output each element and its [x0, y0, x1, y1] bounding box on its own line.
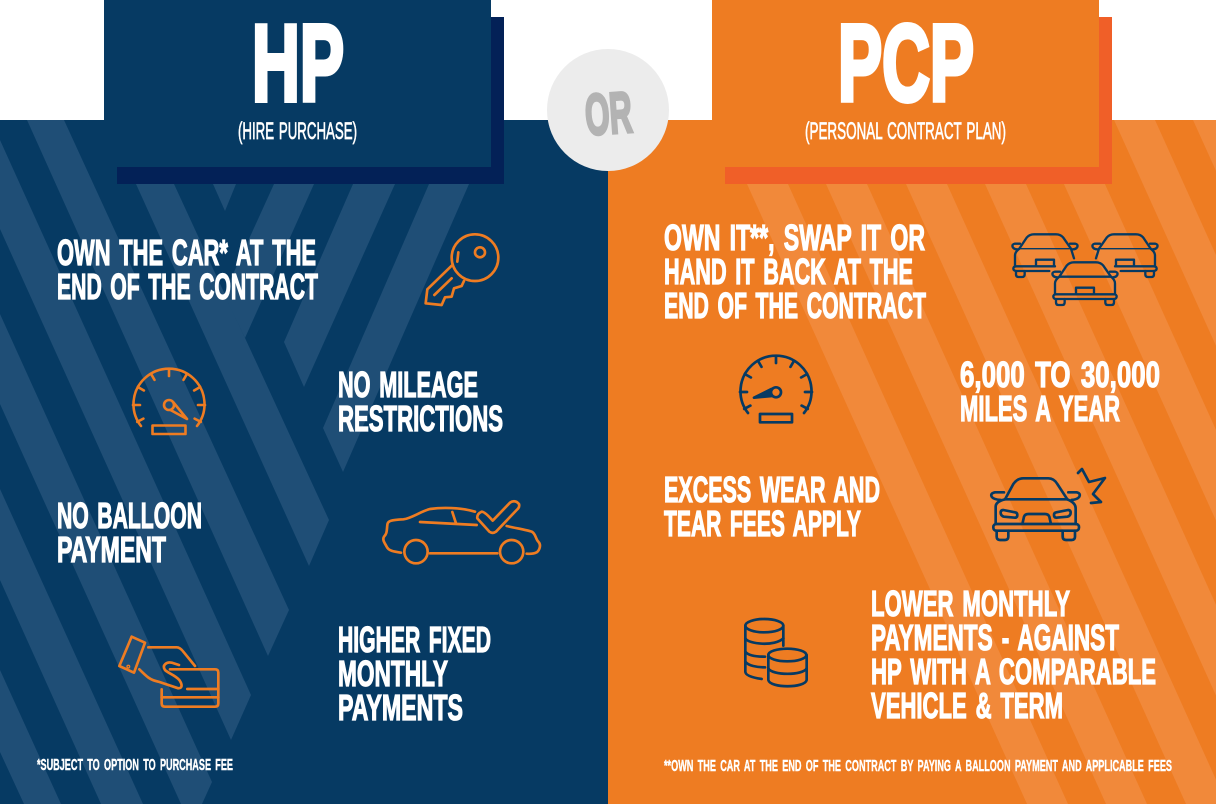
- text: own it swap it: [664, 217, 926, 326]
- text: no mileage restrictions: NO MILEAGE: [338, 364, 478, 405]
- icon: car with check: [383, 501, 540, 563]
- text: higher fixed monthly payments: PAYMENTS: [338, 687, 463, 728]
- text: own the car: END OF THE CONTRACT: [57, 266, 318, 307]
- text: no balloon payment: PAYMENT: [57, 529, 166, 570]
- header: PCP: [712, 0, 1112, 184]
- text: miles a year: [960, 354, 1160, 429]
- text: higher fixed monthly payments: [338, 619, 491, 728]
- badge: OR: [547, 49, 669, 171]
- badge: OR: OR: [583, 80, 634, 148]
- text: no balloon payment: NO BALLOON: [57, 495, 202, 536]
- panel: PCP (right): [608, 0, 1216, 804]
- text: own the car: OWN THE CAR* AT THE: [57, 232, 316, 273]
- header: HP: [104, 0, 504, 184]
- icon: speedometer: [740, 356, 812, 422]
- text: lower monthly payments: VEHICLE & TERM: [871, 685, 1063, 726]
- text: higher fixed monthly payments: MONTHLY: [338, 653, 448, 694]
- text: higher fixed monthly payments: HIGHER FIXED: [338, 619, 491, 660]
- text: excess wear: EXCESS WEAR AND: [664, 469, 880, 510]
- text: lower monthly payments: [871, 583, 1156, 726]
- text: own it swap it: HAND IT BACK AT THE: [664, 251, 913, 292]
- icon: hand with card: [119, 637, 218, 707]
- icon: speedometer: [133, 369, 205, 434]
- text: no mileage restrictions: RESTRICTIONS: [338, 398, 503, 439]
- text: excess wear: TEAR FEES APPLY: [664, 503, 861, 544]
- footnote: HP: *SUBJECT TO OPTION TO PURCHASE FEE: [37, 757, 233, 774]
- text: no balloon payment: [57, 495, 202, 570]
- header: HP: HP: [252, 2, 344, 124]
- icon: key: [426, 234, 498, 305]
- text: excess wear: [664, 469, 880, 544]
- text: own the car: [57, 232, 318, 307]
- header: PCP: PCP: [838, 2, 974, 124]
- text: no mileage restrictions: [338, 364, 503, 439]
- icon: coin stacks: [745, 619, 807, 686]
- header: PCP: (PERSONAL CONTRACT PLAN): [805, 118, 1006, 145]
- text: own it swap it: OWN IT**, SWAP IT OR: [664, 217, 925, 258]
- text: lower monthly payments: LOWER MONTHLY: [871, 583, 1070, 624]
- header: HP: (HIRE PURCHASE): [238, 118, 357, 145]
- icon: damaged car: [991, 469, 1105, 540]
- text: own it swap it: END OF THE CONTRACT: [664, 285, 926, 326]
- icon: three cars: [1012, 234, 1158, 305]
- panel: HP (left): [0, 0, 608, 804]
